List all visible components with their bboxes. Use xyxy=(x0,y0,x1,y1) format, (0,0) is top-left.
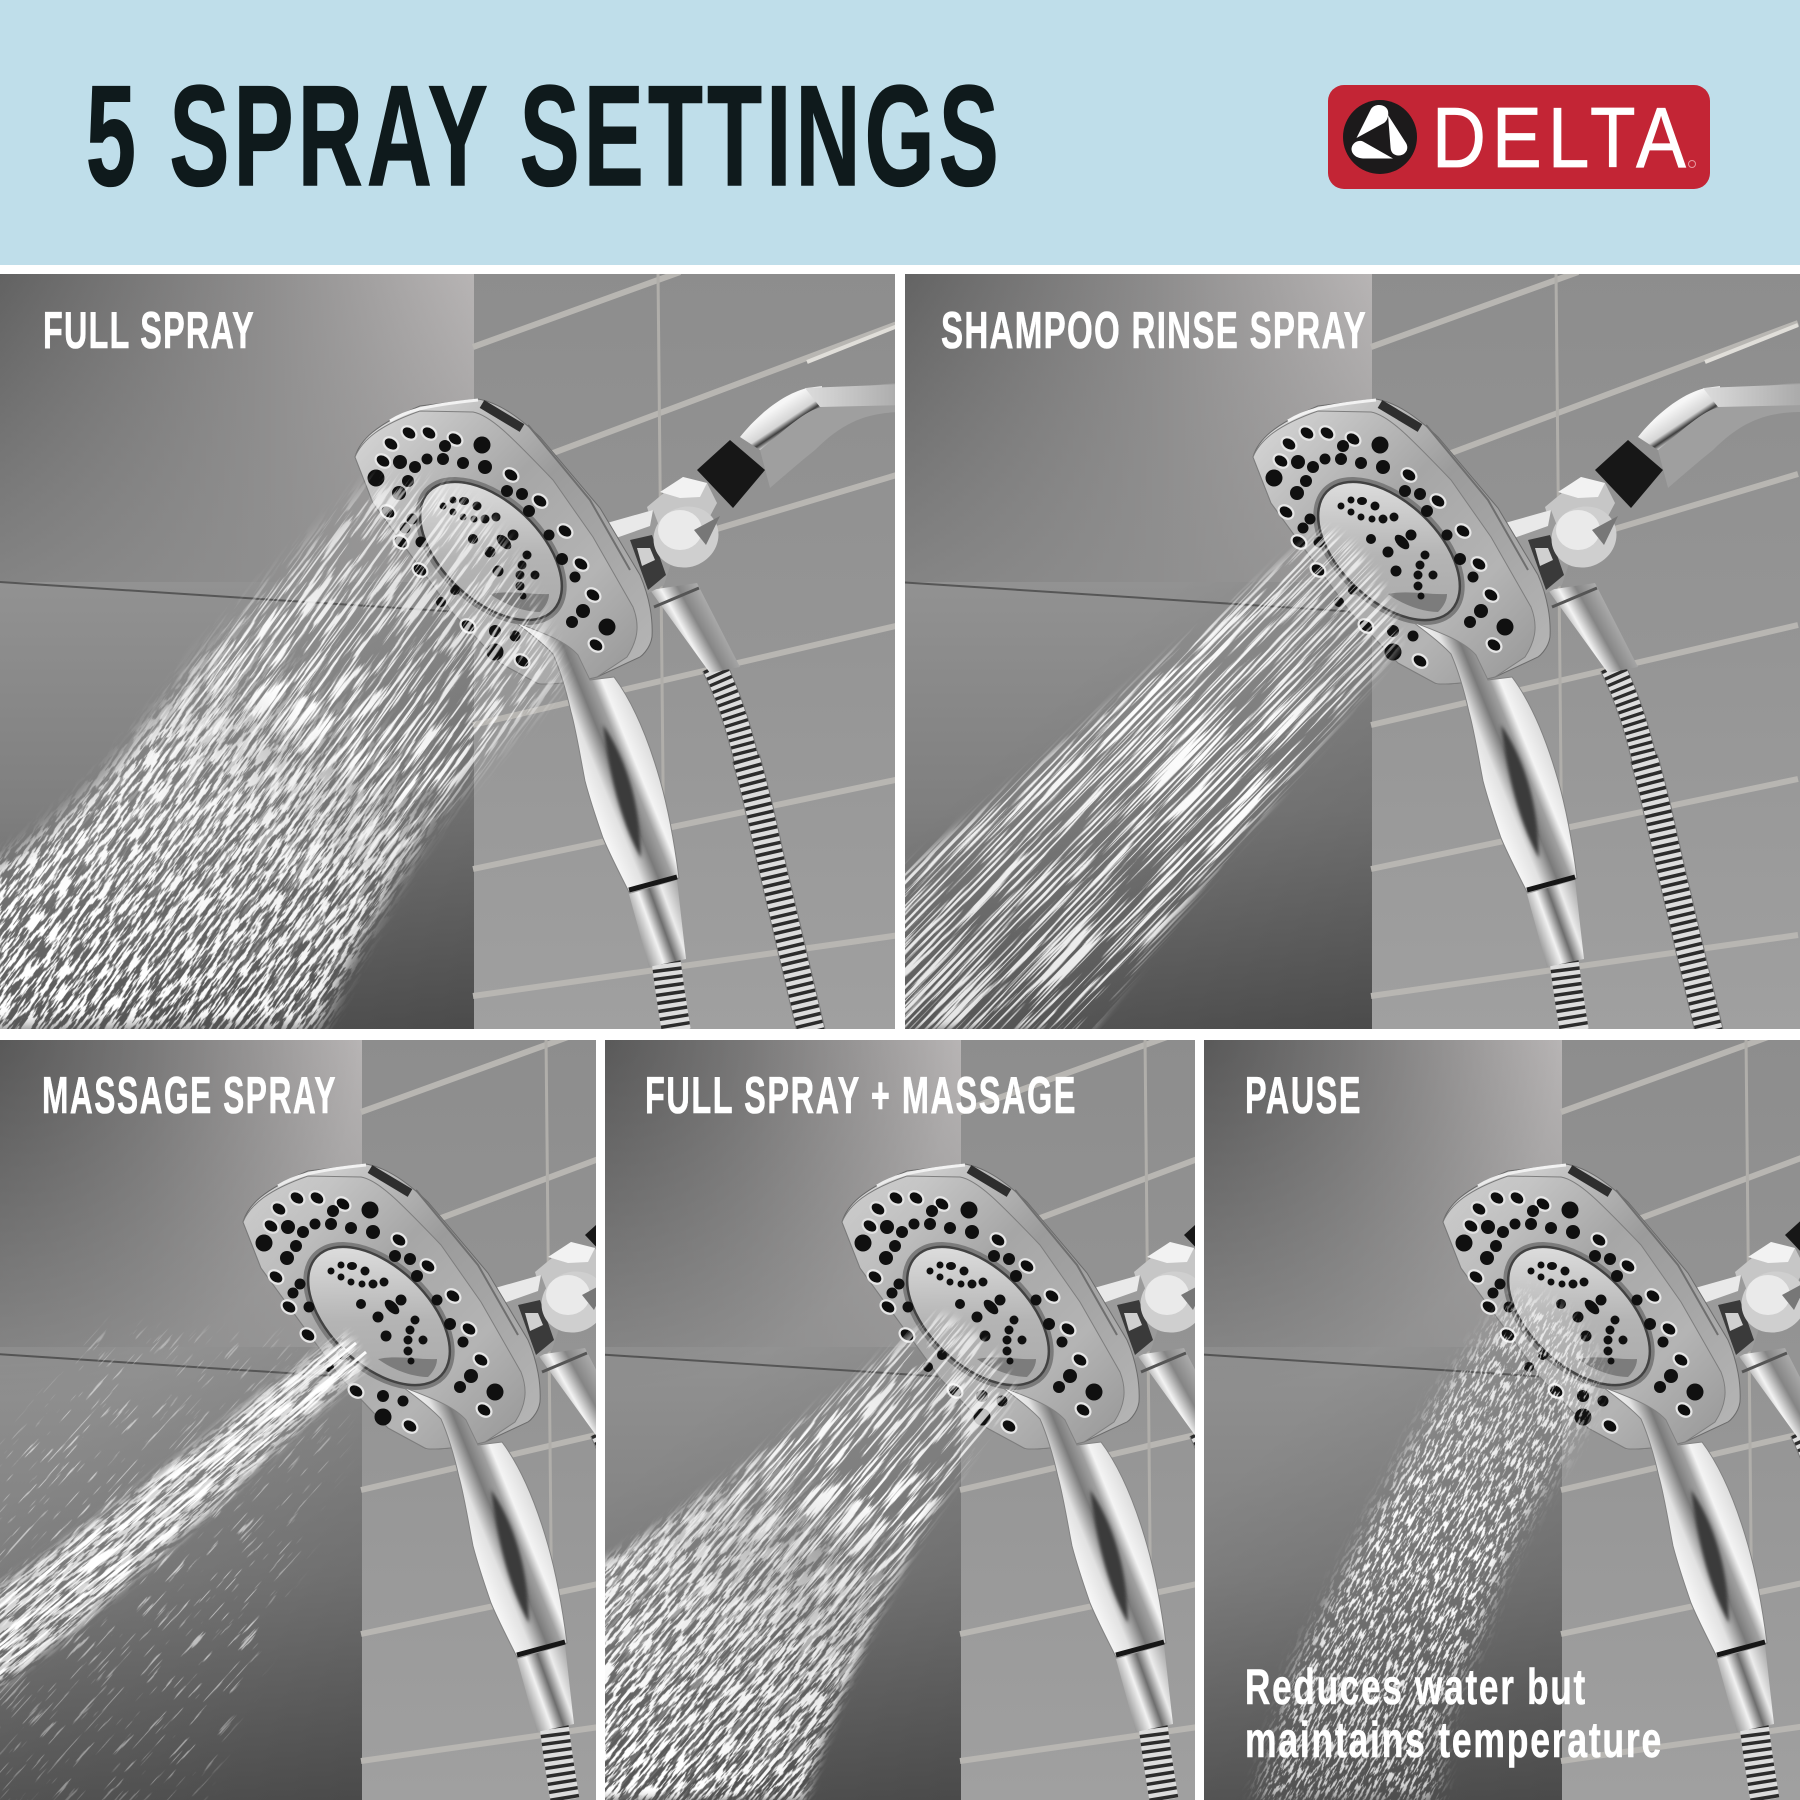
photo: shower head on tile wall xyxy=(605,1040,1195,1800)
note: reduces water but maintains temperature: Reduces water but xyxy=(1245,1659,1587,1715)
photo: shower head on tile wall xyxy=(0,1040,596,1800)
logo: Delta xyxy=(1328,85,1710,189)
logo: Delta: DELTA xyxy=(1432,91,1692,186)
wall shading xyxy=(1204,1040,1486,1303)
panel: full spray plus massage xyxy=(605,1040,1195,1800)
wall shading xyxy=(605,1040,882,1299)
water spray: shampoo rinse xyxy=(905,526,1403,1029)
panel: full spray xyxy=(0,270,905,1035)
label: pause: PAUSE xyxy=(1245,1067,1362,1125)
label: massage spray: MASSAGE SPRAY xyxy=(42,1067,337,1125)
label: full spray plus massage: FULL SPRAY + MASSAGE xyxy=(645,1067,1077,1125)
water spray: full spray plus massage xyxy=(605,1312,1020,1800)
header band xyxy=(0,0,1800,265)
photo: shower head on tile wall xyxy=(888,270,1800,1035)
water spray: pause xyxy=(1248,1288,1608,1800)
photo: shower head on tile wall xyxy=(1204,1040,1800,1800)
label: shampoo rinse spray: SHAMPOO RINSE SPRAY xyxy=(941,302,1367,360)
note: reduces water but maintains temperature xyxy=(1245,1659,1663,1768)
wall shading xyxy=(0,1040,285,1306)
water spray: massage xyxy=(0,1327,370,1800)
photo: shower head on tile wall xyxy=(0,270,905,1035)
panel: shampoo rinse spray xyxy=(888,270,1800,1035)
title: 5 SPRAY SETTINGS xyxy=(86,57,1003,216)
panel: pause xyxy=(1204,1040,1800,1800)
label: full spray: FULL SPRAY xyxy=(43,302,255,360)
panel: massage spray xyxy=(0,1040,596,1800)
water spray: full spray xyxy=(0,470,564,1029)
